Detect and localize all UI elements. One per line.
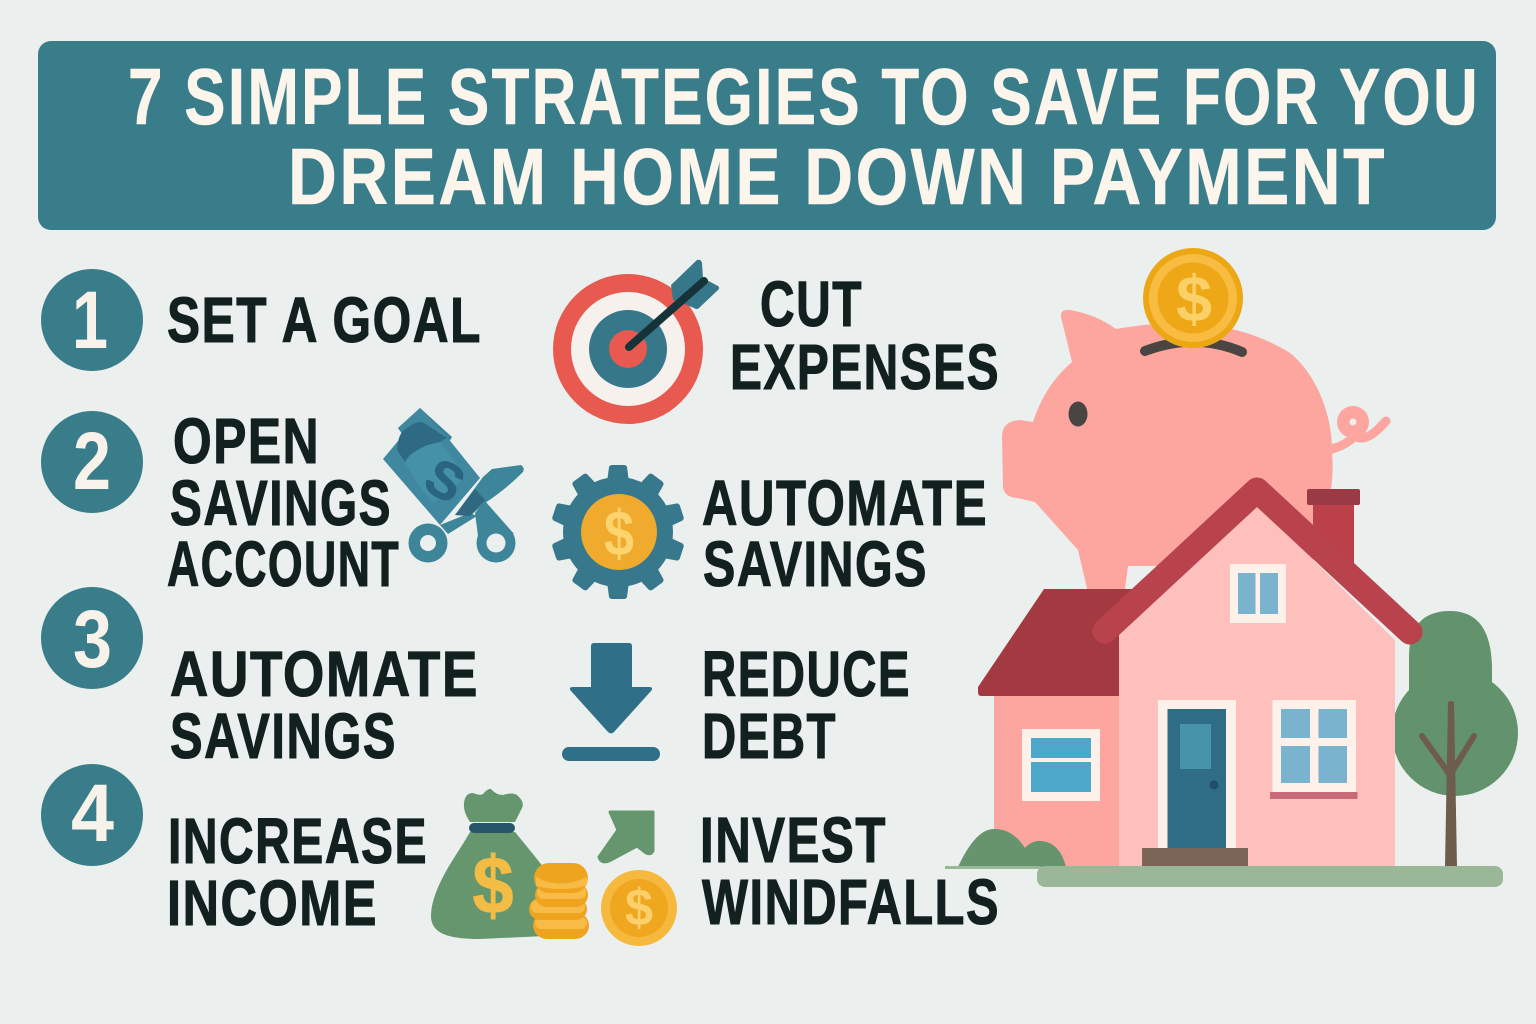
label: automate savings right: AUTOMATE — [702, 467, 988, 539]
label: automate savings right: SAVINGS — [703, 528, 928, 600]
label: automate savings left — [170, 638, 479, 772]
door step — [1142, 848, 1248, 867]
number badge 2: 2 — [73, 416, 111, 507]
label: automate savings right — [702, 467, 988, 600]
door — [1158, 700, 1236, 848]
tree — [1392, 611, 1518, 867]
label: cut expenses: CUT — [760, 268, 863, 340]
label: reduce debt: DEBT — [702, 700, 837, 772]
icon: coin stack — [529, 863, 589, 939]
number badge 4: 4 — [71, 768, 114, 859]
illustration: piggy bank, coin and house — [945, 248, 1518, 887]
label: increase income: INCOME — [167, 867, 378, 939]
attic window — [1230, 564, 1286, 623]
label: open savings account: ACCOUNT — [167, 528, 400, 600]
number badge 1: 1 — [72, 275, 108, 366]
label: cut expenses: EXPENSES — [730, 331, 1000, 403]
label: cut expenses — [730, 268, 1000, 403]
left wing roof — [978, 589, 1135, 696]
left wing wall — [994, 696, 1119, 867]
main roof — [1105, 490, 1410, 632]
number badge 3 — [41, 587, 143, 689]
label: increase income: INCREASE — [168, 805, 428, 877]
number badge 2 — [41, 411, 143, 513]
icon: gear with dollar: $ — [604, 497, 634, 569]
icon: growth arrow — [599, 812, 653, 862]
icon: dollar coin — [601, 870, 677, 946]
left window — [1022, 729, 1100, 801]
bushes — [958, 829, 1066, 867]
ground — [945, 866, 1503, 887]
label: invest windfalls: INVEST — [700, 804, 887, 876]
label: automate savings left: AUTOMATE — [170, 638, 479, 710]
icon: target with arrow — [553, 260, 719, 424]
icon: cut money with scissors: S — [415, 447, 474, 515]
right window — [1270, 700, 1358, 799]
label: automate savings left: SAVINGS — [170, 700, 397, 772]
label: invest windfalls — [700, 804, 1000, 938]
gold coin above piggy — [1143, 248, 1243, 348]
label: reduce debt — [702, 638, 911, 772]
label: increase income — [167, 805, 428, 939]
label: reduce debt: REDUCE — [702, 638, 911, 710]
label: set a goal: SET A GOAL — [167, 284, 482, 356]
icon: down arrow — [562, 643, 660, 761]
title banner — [38, 41, 1496, 230]
number badge 1 — [41, 269, 143, 371]
number badge 3: 3 — [73, 594, 112, 685]
chimney — [1307, 489, 1360, 575]
label: open savings account: OPEN — [173, 405, 320, 477]
icon: dollar coin: $ — [625, 879, 653, 937]
icon: money bag: $ — [472, 841, 514, 931]
label: open savings account: SAVINGS — [170, 467, 392, 539]
gold coin above piggy: $ — [1176, 262, 1212, 335]
piggy bank — [1002, 310, 1386, 600]
main house wall — [1119, 505, 1395, 867]
label: invest windfalls: WINDFALLS — [702, 866, 1000, 938]
icon: gear with dollar — [551, 465, 685, 599]
number badge 4 — [41, 764, 143, 866]
label: open savings account — [167, 405, 400, 600]
icon: cut money with scissors — [383, 408, 524, 562]
icon: money bag — [431, 789, 552, 939]
